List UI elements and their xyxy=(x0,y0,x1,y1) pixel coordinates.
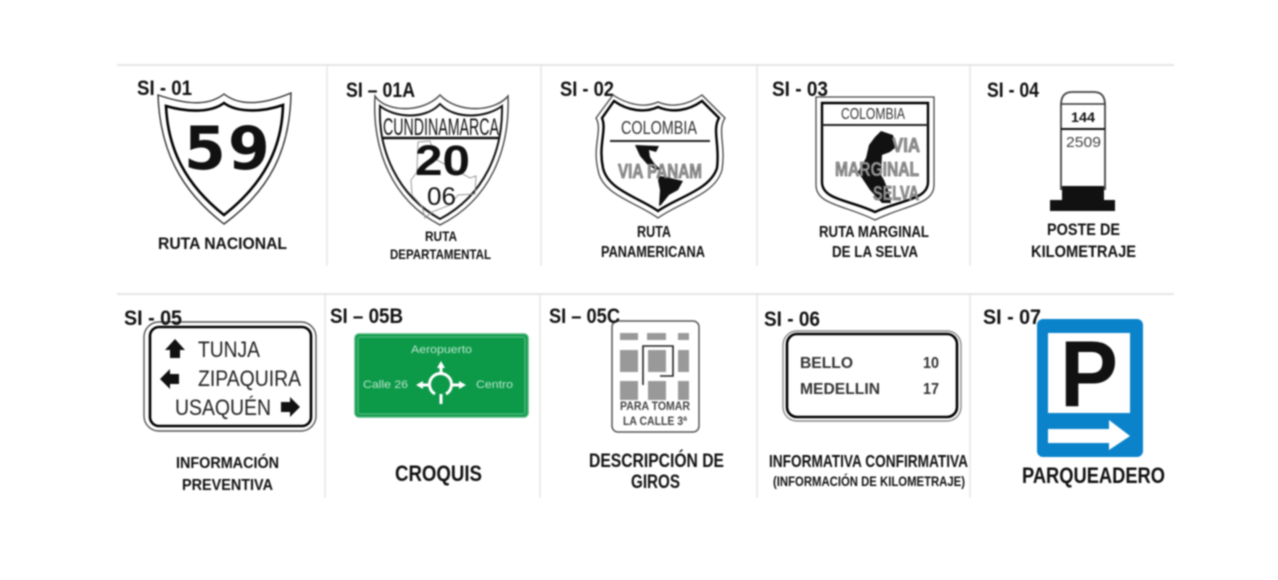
caption: informativa confirmativa xyxy=(769,451,968,489)
caption: informativa confirmativa: (INFORMACIÓN DE KILOMETRAJE) xyxy=(773,474,965,489)
icon: kilometre post: 144 xyxy=(1071,109,1095,125)
icon: direction sign: USAQUÉN xyxy=(175,395,271,420)
icon: green roundabout sign: Centro xyxy=(476,379,513,391)
caption: ruta nacional: RUTA NACIONAL xyxy=(158,234,287,253)
code label SI-04: SI - 04 xyxy=(987,79,1039,102)
arrow: right xyxy=(281,397,300,417)
icon: green roundabout sign: Calle 26 xyxy=(363,379,408,391)
arrow: left xyxy=(160,369,179,389)
icon: blue parking sign xyxy=(1037,319,1143,457)
icon: distance sign xyxy=(783,331,961,421)
icon: distance sign: 10 xyxy=(923,355,939,372)
code label SI-07: SI - 07 xyxy=(983,306,1041,329)
arrow: right xyxy=(1048,420,1130,450)
roundabout arrows xyxy=(416,361,466,404)
icon: direction sign: ZIPAQUIRA xyxy=(198,366,301,391)
icon: departmental route shield: 06 xyxy=(427,183,456,211)
code label SI-01: SI - 01 xyxy=(137,77,192,100)
icon: jungle route shield xyxy=(816,97,934,220)
icon: departmental route shield: CUNDINAMARCA xyxy=(383,114,499,141)
icon: national route shield xyxy=(158,93,291,224)
caption: poste de kilometraje: POSTE DE xyxy=(1047,220,1120,239)
panel: SI-01A ruta departamental xyxy=(346,79,508,262)
icon: national route shield: 59 xyxy=(184,114,270,184)
caption: ruta marginal de la selva xyxy=(819,224,929,261)
code label SI-05: SI - 05 xyxy=(124,307,182,330)
icon: jungle route shield: COLOMBIA xyxy=(841,106,905,123)
arrow: up xyxy=(165,339,185,358)
code label SI-03: SI - 03 xyxy=(772,78,828,101)
icon: kilometre post: 2509 xyxy=(1066,134,1101,151)
panel: SI-01 ruta nacional xyxy=(137,77,291,253)
panel: SI-03 ruta marginal de la selva xyxy=(772,78,934,261)
caption: parqueadero: PARQUEADERO xyxy=(1022,463,1165,488)
icon: panamerican route shield: VIA PANAM xyxy=(618,161,702,183)
code label SI-01A: SI – 01A xyxy=(346,79,415,102)
panel: SI-05C descripción de giros xyxy=(549,305,724,493)
panel: SI-05B croquis xyxy=(330,305,528,486)
icon: panamerican route shield xyxy=(596,95,725,218)
caption: descripción de giros: DESCRIPCIÓN DE xyxy=(589,450,724,472)
icon: direction sign: TUNJA xyxy=(198,337,260,362)
icon: green roundabout sign: Aeropuerto xyxy=(411,344,472,356)
caption: ruta departamental: RUTA xyxy=(425,228,457,244)
caption: ruta panamericana xyxy=(601,224,705,261)
panel: SI-07 parqueadero xyxy=(983,306,1165,488)
caption: descripción de giros xyxy=(589,450,724,493)
caption: poste de kilometraje: KILOMETRAJE xyxy=(1031,242,1136,261)
icon: street turn diagram sign: PARA TOMAR xyxy=(620,399,690,413)
caption: ruta panamericana: RUTA xyxy=(637,224,671,241)
code label SI-06: SI - 06 xyxy=(764,308,820,331)
caption: ruta panamericana: PANAMERICANA xyxy=(601,244,705,261)
icon: direction sign xyxy=(144,322,316,431)
map: Americas xyxy=(635,145,683,206)
map: Colombia and Peru xyxy=(858,131,896,203)
caption: poste de kilometraje xyxy=(1031,220,1136,261)
icon: distance sign: BELLO xyxy=(800,355,853,372)
caption: información preventiva: PREVENTIVA xyxy=(182,477,273,494)
caption: ruta marginal de la selva: RUTA MARGINAL xyxy=(819,224,929,241)
icon: panamerican route shield: COLOMBIA xyxy=(621,118,697,138)
code label SI-05C: SI – 05C xyxy=(549,305,620,328)
caption: informativa confirmativa: INFORMATIVA CONFIRMATIVA xyxy=(769,451,968,471)
icon: street turn diagram sign xyxy=(612,321,699,432)
caption: descripción de giros: GIROS xyxy=(631,472,680,493)
icon: street turn diagram sign: LA CALLE 3ª xyxy=(623,414,687,428)
panel: SI-02 ruta panamericana xyxy=(560,78,725,261)
icon: kilometre post xyxy=(1050,92,1115,211)
panel: SI-04 poste de kilometraje xyxy=(987,79,1136,261)
icon: jungle route shield: MARGINAL xyxy=(835,159,919,181)
caption: información preventiva xyxy=(176,453,279,494)
caption: ruta departamental xyxy=(390,228,491,262)
code label SI-02: SI - 02 xyxy=(560,78,614,101)
caption: información preventiva: INFORMACIÓN xyxy=(176,453,279,472)
icon: jungle route shield: VIA xyxy=(892,135,920,157)
icon: departmental route shield xyxy=(375,95,508,225)
caption: ruta departamental: DEPARTAMENTAL xyxy=(390,246,491,262)
caption: croquis: CROQUIS xyxy=(395,461,482,486)
icon: departmental route shield: 20 xyxy=(415,137,470,185)
icon: jungle route shield: SELVA xyxy=(873,183,919,205)
icon: distance sign: 17 xyxy=(923,381,939,398)
icon: green roundabout sign xyxy=(355,334,528,417)
icon: blue parking sign: P xyxy=(1060,321,1118,426)
icon: distance sign: MEDELLIN xyxy=(800,381,880,398)
panel: SI-06 informativa confirmativa xyxy=(764,308,968,489)
caption: ruta marginal de la selva: DE LA SELVA xyxy=(832,244,918,261)
panel: SI-05 información preventiva xyxy=(124,307,316,494)
code label SI-05B: SI – 05B xyxy=(330,305,403,328)
